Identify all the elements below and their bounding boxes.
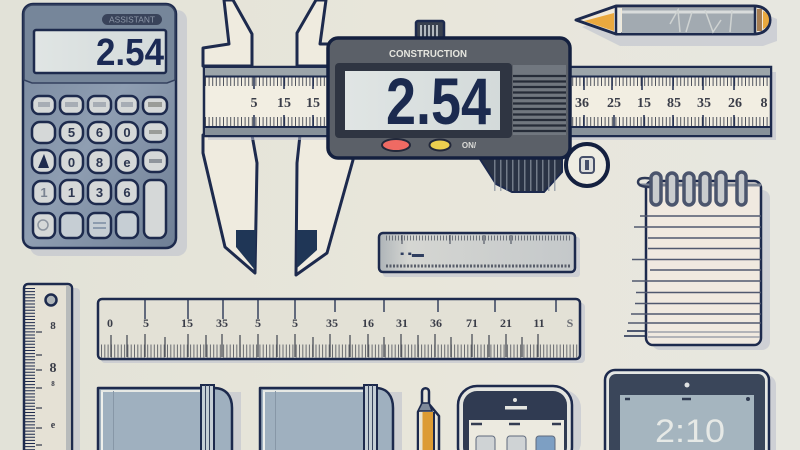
caliper beam scale: 85 (667, 96, 681, 111)
gauge markings: ▪ ▪▬ (400, 249, 424, 260)
long ruler: S (567, 316, 574, 330)
long ruler: 15 (181, 316, 193, 330)
calculator keypad: 3 (96, 185, 103, 200)
calculator display: 2.54 (96, 32, 164, 74)
long ruler: 5 (292, 316, 298, 330)
small pencil (418, 388, 439, 450)
caliper beam scale: 26 (728, 96, 742, 111)
long ruler: 35 (326, 316, 338, 330)
digital caliper (203, 0, 776, 275)
long ruler: 16 (362, 316, 374, 330)
tablet clock time: 2:10 (655, 413, 725, 449)
long ruler: 31 (396, 316, 408, 330)
vertical ruler: 8 (50, 361, 56, 376)
calculator display (34, 30, 166, 74)
vertical ruler: 8 (51, 380, 55, 388)
caliper lower right jaw (296, 135, 353, 275)
calculator keypad: 5 (68, 125, 75, 140)
notebook middle (260, 385, 402, 450)
notebook strap (201, 385, 214, 450)
caliper small label: ON/ (462, 141, 477, 150)
caliper beam scale (204, 67, 776, 140)
notebook left (98, 385, 241, 450)
smartphone (458, 386, 581, 450)
caliper beam scale: 25 (607, 96, 621, 111)
caliper beam scale: 5 (250, 96, 258, 111)
caliper beam scale: 15 (306, 96, 320, 111)
caliper upper left jaw (203, 0, 252, 66)
long ruler: 21 (500, 316, 512, 330)
long ruler: 35 (216, 316, 228, 330)
calculator keypad: 1 (40, 185, 48, 200)
vertical ruler: e (51, 420, 56, 431)
caliper body (328, 38, 570, 158)
vertical ruler (24, 284, 80, 450)
long ruler: 36 (430, 316, 442, 330)
caliper dial circle (566, 144, 608, 186)
vertical ruler: 8 (50, 320, 56, 332)
tablet screen (620, 395, 754, 450)
tablet (605, 370, 776, 450)
calculator keypad: 0 (68, 155, 75, 170)
long ruler: 0 (107, 316, 113, 330)
long ruler: 5 (255, 316, 261, 330)
caliper yellow button (430, 140, 450, 150)
caliper upper right jaw (297, 0, 330, 66)
calculator brand badge: ASSISTANT (109, 16, 155, 24)
long ruler: 71 (466, 316, 478, 330)
caliper top knob (416, 21, 444, 39)
notepad ruled lines (628, 216, 761, 323)
caliper beam scale: 15 (277, 96, 291, 111)
long ruler: 11 (533, 316, 545, 330)
calculator keypad: 6 (123, 185, 131, 200)
calculator keypad: e (123, 155, 131, 170)
long ruler: 5 (143, 316, 149, 330)
calculator brand badge (102, 14, 162, 25)
calculator keypad: 0 (123, 125, 131, 140)
caliper brand text: CONSTRUCTION (389, 48, 467, 60)
caliper red button (382, 139, 410, 151)
caliper display (335, 63, 512, 138)
caliper vent grille (513, 65, 566, 135)
caliper beam scale: 36 (575, 96, 589, 111)
caliper thumb wheel (478, 156, 562, 192)
notebook strap (364, 385, 377, 450)
caliper beam scale: 15 (637, 96, 651, 111)
spiral notepad (624, 172, 770, 350)
phone speaker (505, 398, 527, 410)
calculator (23, 4, 187, 256)
caliper beam scale: 35 (697, 96, 711, 111)
calculator keypad: 1 (68, 185, 75, 200)
calculator keypad: 8 (96, 155, 103, 170)
notepad spiral binding (638, 172, 760, 205)
calculator keypad (32, 96, 167, 238)
calculator top panel (24, 5, 175, 83)
caliper lower left jaw (203, 135, 257, 273)
caliper beam scale: 8 (760, 96, 768, 111)
pencil top right (576, 6, 777, 46)
phone screen (469, 420, 564, 450)
small steel gauge (379, 233, 580, 277)
long ruler (98, 299, 585, 363)
caliper display: 2.54 (386, 64, 491, 138)
calculator keypad: 6 (96, 125, 103, 140)
